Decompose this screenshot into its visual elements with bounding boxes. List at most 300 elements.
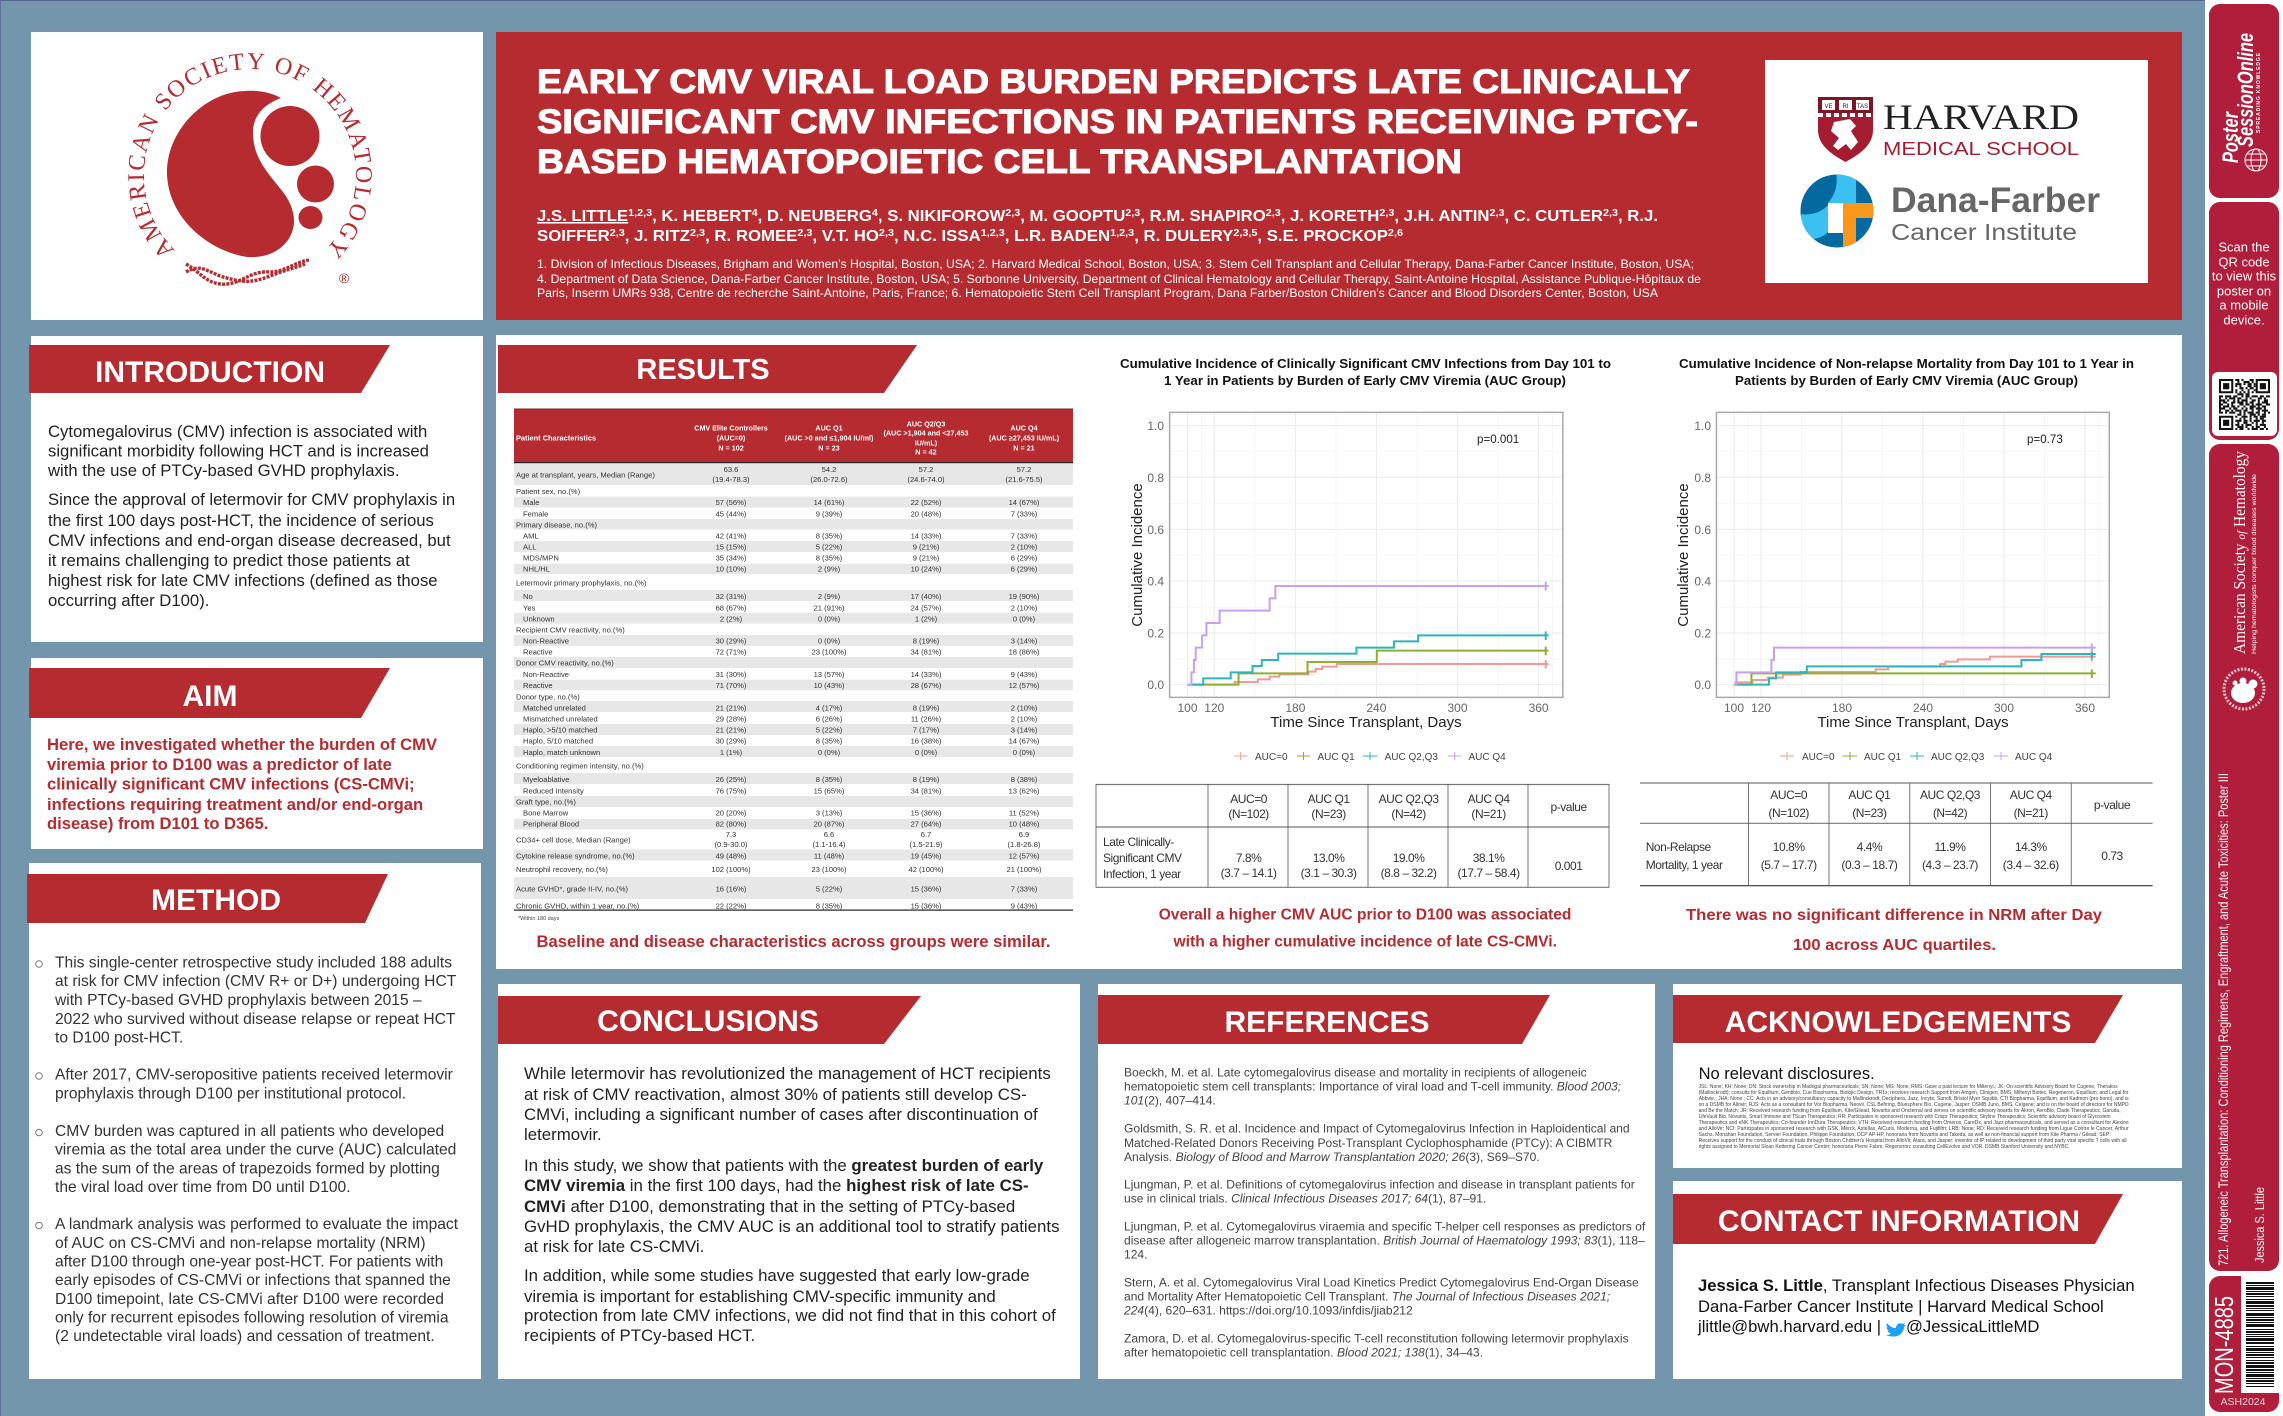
text: introduction body: Since the approval of letermovir for CMV prophylaxis in <box>48 490 455 509</box>
table: NRM incidence: 4.4% <box>1857 840 1883 854</box>
text: method bullets: early episodes of CS-CMVi or infections that spanned the <box>55 1272 451 1289</box>
text: reference list: after hematopoietic cell transplantation. Blood 2021; 138(1), 34–43. <box>1124 1346 1483 1360</box>
icon: barcode <box>2246 1282 2274 1387</box>
table: baseline characteristics: Haplo, match unknown <box>523 748 600 757</box>
table: baseline characteristics: 7 (33%) <box>1011 531 1038 540</box>
text: reference list: 101(2), 407–414. <box>1124 1094 1216 1108</box>
table: NRM incidence: (3.4 – 32.6) <box>2003 858 2059 872</box>
icon: Harvard shield: VE <box>1824 104 1833 110</box>
text: aim body: Here, we investigated whether the burden of CMV <box>47 735 437 754</box>
panel: method <box>27 863 481 1379</box>
table: baseline characteristics: 10 (24%) <box>911 565 942 574</box>
icon: ASH mini logo <box>2224 669 2264 709</box>
icon: red cell <box>167 91 294 257</box>
table: baseline characteristics: Peripheral Blood <box>523 820 579 829</box>
table: baseline characteristics: 7 (17%) <box>913 726 940 735</box>
text: contact details: jlittle@bwh.harvard.edu | <box>1697 1317 1881 1336</box>
callout: CS-CMV finding: Overall a higher CMV AUC prior to D100 was associated <box>1159 906 1571 924</box>
authors: 1,2,3 <box>1110 228 1135 239</box>
title: BASED HEMATOPOIETIC CELL TRANSPLANTATION <box>537 143 1462 181</box>
table: baseline characteristics: 3 (14%) <box>1011 637 1038 646</box>
icon: twitter bird <box>1886 1323 1906 1337</box>
line chart: CS-CMV cumulative incidence: p=0.001 <box>1477 433 1519 446</box>
affiliations <box>537 257 1701 300</box>
table: baseline characteristics: 9 (43%) <box>1011 902 1038 911</box>
institution logos: Dana-Farber <box>1891 181 2100 220</box>
authors: , M. GOOPTU <box>1020 208 1125 225</box>
text: reference list: Ljungman, P. et al. Cytomegalovirus viraemia and specific T-helper cell responses as predictors of <box>1124 1220 1646 1234</box>
table: baseline characteristics: 6 (26%) <box>816 714 843 723</box>
table: baseline characteristics: Haplo, >5/10 matched <box>523 726 598 735</box>
text: conclusions body: viremia is important for establishing CMV-specific immunity and <box>524 1287 996 1306</box>
text: disclosure details <box>1699 1084 2129 1150</box>
table: baseline characteristics: CMV Elite Controllers <box>694 424 768 432</box>
table: baseline characteristics: (26.0-72.6) <box>810 475 848 484</box>
table: baseline characteristics: 1 (1%) <box>720 748 743 757</box>
line chart: CS-CMV cumulative incidence: 1.0 <box>1147 419 1164 433</box>
table: CS-CMV incidence: (N=42) <box>1391 807 1426 821</box>
line chart: CS-CMV cumulative incidence: 100 <box>1177 701 1198 715</box>
text: conclusions body <box>524 1064 1060 1345</box>
authors: , R.J. <box>1618 208 1658 225</box>
table: baseline characteristics: 20 (87%) <box>814 820 845 829</box>
text: introduction body: it remains challenging to predict those patients at <box>48 551 410 570</box>
text: introduction body <box>47 422 455 610</box>
authors: 2,3 <box>690 228 706 239</box>
text: reference list: hematopoietic stem cell transplants: Importance of viral load and T-cell immunity. Blood 2003; <box>1124 1080 1621 1094</box>
table: CS-CMV incidence: (3.1 – 30.3) <box>1301 866 1357 880</box>
table: CS-CMV incidence: (3.7 – 14.1) <box>1221 866 1277 880</box>
table: baseline characteristics: N = 42 <box>915 448 937 456</box>
panel: aim <box>29 658 483 849</box>
table: baseline characteristics: 5 (22%) <box>816 542 843 551</box>
table: baseline characteristics: ALL <box>523 542 537 551</box>
line chart: CS-CMV cumulative incidence <box>1129 412 1563 763</box>
text: reference list: Boeckh, M. et al. Late cytomegalovirus disease and mortality in recipients of allogeneic <box>1124 1066 1587 1080</box>
table: baseline characteristics: 7 (33%) <box>1011 509 1038 518</box>
table: baseline characteristics: 29 (28%) <box>716 714 747 723</box>
table: NRM incidence: (5.7 – 17.7) <box>1761 858 1817 872</box>
text: method bullets: of AUC on CS-CMVi and non-relapse mortality (NRM) <box>55 1235 426 1252</box>
authors: SOIFFER <box>537 228 604 245</box>
text: scan prompt <box>2212 240 2277 328</box>
table: baseline characteristics: Letermovir primary prophylaxis, no.(%) <box>516 579 647 588</box>
table: baseline characteristics: NHL/HL <box>523 565 550 574</box>
text: method bullets: prophylaxis through D100 per institutional protocol. <box>55 1086 406 1102</box>
text: disclosure details: rights assigned to Memorial Sloan Kettering Cancer Center; honoraria Pierre Fabre, Regeneron; consulting CellEvolve and VOR. DSMB Stanford University and NYBC. <box>1699 1144 2070 1150</box>
line chart: NRM cumulative incidence: 300 <box>1994 701 2014 715</box>
table: CS-CMV incidence: (17.7 – 58.4) <box>1457 866 1520 880</box>
table: baseline characteristics: Myeloablative <box>523 775 569 784</box>
table: baseline characteristics: 6.7 <box>921 830 931 839</box>
table: baseline characteristics: (AUC ≥27,453 IU/mL) <box>989 434 1060 442</box>
text: contact details: Jessica S. Little, Transplant Infectious Diseases Physician <box>1698 1276 2135 1295</box>
panel: ASH logo <box>31 32 483 320</box>
table: baseline characteristics: 68 (67%) <box>716 603 747 612</box>
table: baseline characteristics: Patient sex, no.(%) <box>516 487 581 496</box>
text: scan prompt: poster on <box>2217 284 2271 298</box>
callout: baseline similarity: Baseline and disease characteristics across groups were similar. <box>536 933 1050 951</box>
text: introduction body: highest risk for late CMV infections (defined as those <box>48 571 438 590</box>
authors: , R. ROMEE <box>705 228 797 245</box>
institution logos: MEDICAL SCHOOL <box>1883 139 2079 159</box>
text: reference list: disease after allogeneic marrow transplantation. British Journal of Haematology 1993; 83(1), 118– <box>1124 1234 1645 1248</box>
table: baseline characteristics: 10 (43%) <box>814 681 845 690</box>
text: reference list: and Mortality After Hematopoietic Cell Transplant. The Journal of Infectious Diseases 2021; <box>1124 1290 1610 1304</box>
table: baseline characteristics: 6 (29%) <box>1011 554 1038 563</box>
table: baseline characteristics: 20 (20%) <box>716 809 747 818</box>
table: baseline characteristics: 23 (100%) <box>811 865 847 874</box>
text: method bullets: at risk for CMV infection (CMV R+ or D+) undergoing HCT <box>55 973 457 990</box>
table: baseline characteristics: Mismatched unrelated <box>523 714 598 723</box>
table: baseline characteristics: 12 (57%) <box>1009 851 1040 860</box>
panel: contact information <box>1673 1181 2182 1379</box>
table: baseline characteristics: Patient Characteristics <box>516 434 596 442</box>
table: NRM incidence: 10.8% <box>1773 840 1805 854</box>
table: baseline characteristics: (1.5-21.9) <box>910 840 943 849</box>
authors: , J.H. ANTIN <box>1394 208 1489 225</box>
table: baseline characteristics: 49 (48%) <box>716 851 747 860</box>
text: disclosure details: and AlloVir; NCI: Participates in sponsored research with GSK, Merck, Astellas, AiCuris, Moderna, and Fujifilm; LRB: None; RD: Received research funding from Ligue Contre le Cancer, Arthur <box>1699 1126 2129 1132</box>
table: baseline characteristics: Reduced Intensity <box>523 786 584 795</box>
table: baseline characteristics: 15 (36%) <box>911 809 942 818</box>
table: baseline characteristics: 76 (75%) <box>716 786 747 795</box>
table: baseline characteristics: Graft type, no.(%) <box>516 797 576 806</box>
table: baseline characteristics: (1.1-16.4) <box>813 840 846 849</box>
table: baseline characteristics: Chronic GVHD, within 1 year, no.(%) <box>516 902 640 911</box>
line chart: NRM cumulative incidence: 0.8 <box>1694 471 1711 485</box>
legend <box>1234 752 1506 763</box>
text: scan prompt: to view this <box>2212 268 2277 284</box>
table: baseline characteristics: 14 (67%) <box>1009 498 1040 507</box>
authors: 2,3 <box>879 228 894 239</box>
text: introduction body: significant morbidity following HCT and is increased <box>48 442 429 460</box>
title: EARLY CMV VIRAL LOAD BURDEN PREDICTS LATE CLINICALLY <box>537 63 1690 101</box>
heading: results <box>498 345 917 393</box>
authors: 2,3,5 <box>1233 228 1258 239</box>
text: reference list: 124. <box>1124 1248 1147 1262</box>
table: baseline characteristics: 12 (57%) <box>1009 681 1040 690</box>
legend: AUC=0 <box>1802 752 1835 763</box>
table: CS-CMV incidence: AUC Q4 <box>1468 792 1510 806</box>
text: introduction body: the first 100 days post-HCT, the incidence of serious <box>48 511 434 530</box>
authors: 2,3 <box>797 228 813 239</box>
text: disclosure details: Sachs, Monahan Foundation, Servier Foundation, Philippe Foundation, DCP AP-HP, honoraria from Novartis and Takeda, as well as non-financial support from Kite Pharma / Gilead; SEP: <box>1699 1132 2111 1138</box>
table: baseline characteristics: No <box>523 592 533 601</box>
text: method bullets: CMV burden was captured in all patients who developed <box>55 1123 444 1140</box>
authors: , S. NIKIFOROW <box>878 208 1006 225</box>
text: conclusions body: CMVi, including a significant number of cases after discontinuation of <box>524 1105 1038 1124</box>
line chart: CS-CMV cumulative incidence: 360 <box>1529 701 1549 715</box>
text: aim body: viremia prior to D100 was a predictor of late <box>47 755 392 774</box>
institution logos: Cancer Institute <box>1891 219 2077 245</box>
authors <box>537 208 1658 245</box>
heading: method <box>27 874 388 923</box>
table: baseline characteristics: 3 (13%) <box>816 809 843 818</box>
table: baseline characteristics: 5 (22%) <box>816 885 843 894</box>
table: baseline characteristics: 34 (81%) <box>911 648 942 657</box>
table: NRM incidence: (N=23) <box>1852 806 1887 820</box>
text: method bullets: 2022 who survived without disease relapse or repeat HCT <box>55 1011 456 1028</box>
table: baseline characteristics: Donor CMV reactivity, no.(%) <box>516 659 614 668</box>
table: baseline characteristics: (AUC >1,904 and <27,453 <box>883 428 969 438</box>
table: NRM incidence: Mortality, 1 year <box>1646 858 1723 872</box>
table: baseline characteristics: Female <box>523 509 548 518</box>
line chart: CS-CMV cumulative incidence: Cumulative Incidence <box>1129 483 1146 627</box>
table: CS-CMV incidence: Significant CMV <box>1103 851 1182 865</box>
table: baseline characteristics: 54.2 <box>822 465 836 474</box>
table: baseline characteristics: (21.6-75.5) <box>1005 475 1043 484</box>
table: baseline characteristics: 16 (38%) <box>911 737 942 746</box>
authors: 2,6 <box>1388 228 1403 239</box>
table: baseline characteristics: 32 (31%) <box>716 592 747 601</box>
line chart: NRM cumulative incidence: 180 <box>1832 701 1852 715</box>
table: baseline characteristics: 2 (9%) <box>818 592 841 601</box>
authors: 1,2,3 <box>981 228 1005 239</box>
text: reference list: Stern, A. et al. Cytomegalovirus Viral Load Kinetics Predict Cytomegalovirus End-Organ Disease <box>1124 1276 1639 1290</box>
table: baseline characteristics: 8 (35%) <box>816 737 843 746</box>
table: baseline characteristics: Non-Reactive <box>523 670 569 679</box>
heading: references <box>1098 995 1550 1044</box>
table: NRM incidence: (N=21) <box>2014 806 2048 820</box>
sidebar tab: ASH session information: American Society of Hematology <box>2230 450 2249 654</box>
sidebar tab: ASH session information: 721. Allogeneic Transplantation: Conditioning Regimens, Engraftment, and Acute Toxicities: Poster III <box>2215 773 2231 1266</box>
table: baseline characteristics: 11 (52%) <box>1009 809 1040 818</box>
line chart: CS-CMV cumulative incidence: 300 <box>1447 701 1468 715</box>
table: baseline characteristics: Reactive <box>523 681 553 690</box>
legend: AUC Q2,Q3 <box>1931 752 1985 763</box>
authors: , R.M. SHAPIRO <box>1140 208 1266 225</box>
table: CS-CMV incidence: (8.8 – 32.2) <box>1381 866 1437 880</box>
line chart: CS-CMV cumulative incidence: 240 <box>1366 701 1387 715</box>
line chart: NRM cumulative incidence: 0.0 <box>1694 678 1711 692</box>
table: baseline characteristics: 10 (10%) <box>716 565 747 574</box>
table: baseline characteristics: Cytokine release syndrome, no.(%) <box>516 851 635 860</box>
sidebar tab: poster ID and barcode: MON-4885 <box>2209 1296 2239 1394</box>
table: NRM incidence: (0.3 – 18.7) <box>1841 858 1898 872</box>
title <box>537 63 1698 181</box>
sidebar tab: ASH session information: Helping hematologists conquer blood diseases worldwide <box>2251 474 2258 654</box>
legend: AUC Q4 <box>2015 752 2053 763</box>
authors: 2,3 <box>1603 208 1618 219</box>
text: method bullets: After 2017, CMV-seropositive patients received letermovir <box>55 1067 453 1084</box>
text: introduction body: occurring after D100). <box>48 591 209 610</box>
table: baseline characteristics: 21 (91%) <box>814 603 845 612</box>
table: baseline characteristics: 20 (48%) <box>911 509 942 518</box>
table: baseline characteristics: Yes <box>523 603 536 612</box>
table: CS-CMV incidence: (N=102) <box>1228 807 1269 821</box>
text: aim body: infections requiring treatment and/or end-organ <box>47 795 423 814</box>
line chart: NRM cumulative incidence: 0.4 <box>1694 574 1711 588</box>
callout: NRM finding <box>1686 907 2102 954</box>
table: baseline characteristics: AUC Q2/Q3 <box>907 420 945 428</box>
table: baseline characteristics: Unknown <box>523 614 555 623</box>
table: baseline characteristics: AML <box>523 531 539 540</box>
table: baseline characteristics: 14 (67%) <box>1009 737 1040 746</box>
text: method bullets: (2 undetectable viral loads) and cessation of treatment. <box>55 1328 435 1345</box>
sidebar tab: poster session online: SPREADING KNOWLEDGE <box>2256 52 2262 133</box>
institution logos: HARVARD <box>1883 97 2079 137</box>
text: scan prompt: Scan the <box>2218 240 2270 254</box>
table: baseline characteristics: 2 (10%) <box>1011 542 1038 551</box>
chart title: CS-CMV: 1 Year in Patients by Burden of Early CMV Viremia (AUC Group) <box>1164 373 1566 388</box>
line chart: NRM cumulative incidence: Time Since Transplant, Days <box>1817 714 2009 731</box>
table: baseline characteristics: 8 (35%) <box>816 531 843 540</box>
table: CS-CMV incidence: 38.1% <box>1473 851 1505 865</box>
table: baseline characteristics: *Within 180 days <box>518 916 560 922</box>
table: baseline characteristics: 0 (0%) <box>818 614 841 623</box>
authors: 2,3 <box>610 228 625 239</box>
table: baseline characteristics: 63.6 <box>724 465 738 474</box>
table: CS-CMV incidence: AUC Q1 <box>1308 792 1350 806</box>
table: baseline characteristics: 8 (19%) <box>913 703 940 712</box>
heading: conclusions: CONCLUSIONS <box>597 1005 819 1038</box>
text: contact details <box>1697 1276 2135 1336</box>
chart title: NRM <box>1679 356 2134 388</box>
heading: contact information: CONTACT INFORMATION <box>1718 1205 2080 1238</box>
table: baseline characteristics: Primary disease, no.(%) <box>516 520 597 529</box>
authors: 4 <box>872 208 878 219</box>
table: CS-CMV incidence: 19.0% <box>1393 851 1425 865</box>
table: baseline characteristics: 0 (0%) <box>818 748 841 757</box>
line chart: NRM cumulative incidence: 100 <box>1724 701 1744 715</box>
authors: , K. HEBERT <box>652 208 752 225</box>
authors: 1,2,3 <box>628 208 653 219</box>
legend: AUC Q1 <box>1864 752 1902 763</box>
table: baseline characteristics: Reactive <box>523 648 553 657</box>
heading: results: RESULTS <box>636 354 770 386</box>
table: baseline characteristics: 30 (29%) <box>716 637 747 646</box>
table: CS-CMV incidence: AUC Q2,Q3 <box>1379 792 1439 806</box>
text: method bullets: A landmark analysis was performed to evaluate the impact <box>55 1216 459 1233</box>
text: disclosure details: Therapeutics and eNK Therapeutics; Co-founder InnDura Therapeutics; VTH: Received research funding from Omeros, CareDx, and Jazz pharmaceuticals, and served as a consultant for Alexion <box>1699 1120 2129 1126</box>
table: baseline characteristics: 2 (2%) <box>720 614 743 623</box>
table: baseline characteristics: 42 (100%) <box>908 865 944 874</box>
table: baseline characteristics: 2 (10%) <box>1011 703 1038 712</box>
callout: CS-CMV finding <box>1159 906 1571 951</box>
line chart: CS-CMV cumulative incidence: Time Since Transplant, Days <box>1270 714 1462 731</box>
sidebar tab: QR code <box>2209 202 2279 440</box>
text: conclusions body: recipients of PTCy-based HCT. <box>524 1326 755 1345</box>
table: NRM incidence: AUC=0 <box>1770 788 1808 802</box>
chart title: NRM: Cumulative Incidence of Non-relapse Mortality from Day 101 to 1 Year in <box>1679 356 2134 371</box>
table: baseline characteristics: 15 (36%) <box>911 885 942 894</box>
table: NRM incidence: 0.73 <box>2101 849 2124 863</box>
text: conclusions body: GvHD prophylaxis, the CMV AUC is an additional tool to stratify patients <box>524 1217 1060 1236</box>
text: method bullets: viremia as the total area under the curve (AUC) calculated <box>55 1142 456 1159</box>
table: baseline characteristics: 3 (14%) <box>1011 726 1038 735</box>
text: reference list <box>1123 1066 1646 1360</box>
text: conclusions body: at risk of CMV reactivation, almost 30% of patients still develop CS- <box>524 1085 1027 1104</box>
text: conclusions body: CMVi after D100, demonstrating that in the setting of PTCy-based <box>524 1197 1015 1216</box>
table: baseline characteristics: 9 (21%) <box>913 554 940 563</box>
chart title: CS-CMV: Cumulative Incidence of Clinically Significant CMV Infections from Day 101 to <box>1120 356 1611 371</box>
line chart: NRM cumulative incidence: p=0.73 <box>2027 433 2063 446</box>
panel: introduction <box>29 336 483 642</box>
authors: J.S. LITTLE <box>537 208 628 225</box>
table: baseline characteristics: 21 (21%) <box>716 726 747 735</box>
text: method bullets: D100 timepoint, late CS-CMVi after D100 were recorded <box>55 1291 444 1308</box>
table: baseline characteristics: AUC Q1 <box>815 424 843 432</box>
text: method bullets: This single-center retrospective study included 188 adults <box>55 954 452 971</box>
text: conclusions body: protection from late CMV infections, we did not find that in this cohort of <box>524 1306 1056 1325</box>
table: baseline characteristics: 14 (33%) <box>911 531 942 540</box>
icon: Harvard shield: TAS <box>1857 104 1868 110</box>
line chart: NRM cumulative incidence <box>1675 412 2109 763</box>
table: baseline characteristics: 8 (19%) <box>913 775 940 784</box>
table: baseline characteristics: 2 (10%) <box>1011 714 1038 723</box>
table: baseline characteristics: Bone Marrow <box>523 809 569 818</box>
table: baseline characteristics: (AUC >0 and ≤1,904 IU/ml) <box>785 434 874 442</box>
text: aim body <box>47 735 437 833</box>
line chart: CS-CMV cumulative incidence: 180 <box>1285 701 1306 715</box>
text: method bullets <box>36 954 459 1345</box>
heading: aim <box>29 668 390 718</box>
text: scan prompt: QR code <box>2218 254 2270 270</box>
table: NRM incidence: Non-Relapse <box>1646 840 1712 854</box>
authors: 2,3 <box>1125 208 1141 219</box>
title: SIGNIFICANT CMV INFECTIONS IN PATIENTS RECEIVING PTCY- <box>537 103 1698 141</box>
table: CS-CMV incidence: 7.8% <box>1236 851 1262 865</box>
text: aim body: clinically significant CMV infections (CS-CMVi; <box>47 774 415 794</box>
line chart: NRM cumulative incidence: 360 <box>2075 701 2095 715</box>
authors: , J. RITZ <box>625 228 691 245</box>
text: disclosure details: JSL: None; KH: None; DN: Stock ownership in Madrigal pharmaceuticals; SN: None; MG: None; RMS: Gave a paid lecture for Miltenyi.; JK: On scientific Advisory Board for Cugene, Therakos <box>1699 1084 2118 1090</box>
authors: 4 <box>752 208 758 219</box>
table: baseline characteristics: 72 (71%) <box>716 648 747 657</box>
table: baseline characteristics: 8 (38%) <box>1011 775 1038 784</box>
table: NRM incidence: 14.3% <box>2015 840 2047 854</box>
text: method bullets: the viral load over time from D0 until D100. <box>55 1179 351 1196</box>
authors: 2,3 <box>1266 208 1281 219</box>
line chart: CS-CMV cumulative incidence: 0.0 <box>1147 678 1164 692</box>
text: disclosure details: Abbvie.; JHA: None ; CC: Acts in an advisory/consultancy capacity to Mallinckrodt, Deciphera, Jazz, Incyte, Sanofi, Bristol Myer Squibb, CTI Biopharma, Equillium, and Kadmon (pro bono); and is <box>1699 1096 2129 1102</box>
line chart: NRM cumulative incidence: Cumulative Incidence <box>1675 483 1692 627</box>
table: NRM incidence: (N=42) <box>1933 806 1968 820</box>
line chart: NRM cumulative incidence: 1.0 <box>1694 419 1711 433</box>
panel: ASH logo: AMERICAN SOCIETY OF HEMATOLOGY <box>128 53 372 260</box>
table: baseline characteristics: Acute GVHD*, grade II-IV, no.(%) <box>516 885 628 894</box>
sidebar tab: ASH session information: Jessica S. Little <box>2252 1187 2267 1263</box>
line chart: CS-CMV cumulative incidence: 0.2 <box>1147 626 1164 640</box>
text: disclosure details: Receives support for the conduct of clinical trials through Boston Children's Hospital from AlloVir, Atara, and Jasper; inventor of IP related to development of third party viral specific T cells with all <box>1699 1138 2127 1144</box>
table: baseline characteristics: 9 (39%) <box>816 509 843 518</box>
table: baseline characteristics <box>514 408 1073 922</box>
line chart: CS-CMV cumulative incidence: 0.8 <box>1147 471 1164 485</box>
panel: ASH logo: ® <box>339 270 350 286</box>
table: baseline characteristics: 31 (30%) <box>716 670 747 679</box>
table: CS-CMV incidence: p-value <box>1550 800 1587 814</box>
table: baseline characteristics: 6.9 <box>1019 830 1029 839</box>
table: baseline characteristics: Haplo, 5/10 matched <box>523 737 593 746</box>
table: baseline characteristics: 11 (48%) <box>814 851 845 860</box>
table: baseline characteristics: 35 (34%) <box>716 554 747 563</box>
heading: conclusions <box>498 996 921 1044</box>
text: contact details: @JessicaLittleMD <box>1906 1317 2039 1336</box>
text: aim body: disease) from D101 to D365. <box>47 814 268 833</box>
table: NRM incidence: 11.9% <box>1935 840 1966 854</box>
institution logos <box>1765 60 2148 283</box>
table: baseline characteristics: N = 102 <box>718 444 744 452</box>
heading: method: METHOD <box>151 884 281 917</box>
table: baseline characteristics: 19 (45%) <box>911 851 942 860</box>
table: baseline characteristics: 57.2 <box>1017 465 1031 474</box>
sidebar tab: ASH session information <box>2209 444 2279 1271</box>
heading: aim: AIM <box>182 680 238 713</box>
panel: title <box>496 32 2182 320</box>
text: disclosure details: (Mallinckrodt); consults for Equillium, Gentibio, Cue Biopharma, Biolojic Design, TR1x; receives research Support from Amgen, Clinigen, BMS, Miltenyi Biotec, Regeneron, Equillium; and Legal for <box>1699 1090 2129 1096</box>
table: NRM incidence: AUC Q4 <box>2010 788 2053 802</box>
